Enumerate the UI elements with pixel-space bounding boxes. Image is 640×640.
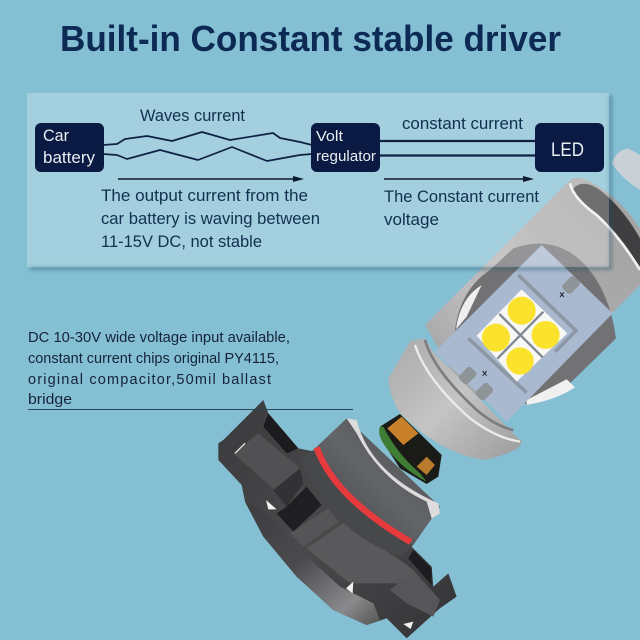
arrow: left — [118, 176, 304, 182]
block: LED — [535, 123, 604, 172]
circuit board — [435, 245, 613, 422]
block: volt regulator — [311, 123, 380, 172]
cylinder shell — [425, 178, 640, 403]
panel: translucent diagram background — [27, 93, 609, 267]
outer band — [245, 502, 380, 625]
block: car battery: Car — [43, 127, 69, 145]
constant current lines — [380, 141, 535, 156]
block: car battery: battery — [43, 149, 96, 167]
text: output current explanation — [101, 186, 320, 251]
icon: bulb base with red seal — [218, 400, 457, 638]
text: specifications — [28, 330, 290, 408]
block: volt regulator: regulator — [316, 148, 376, 165]
arrow: right — [384, 176, 534, 182]
text: specifications: bridge — [28, 392, 72, 408]
text: output current explanation: 11-15V DC, not stable — [101, 232, 262, 251]
LED chip — [477, 289, 567, 382]
collar — [388, 338, 522, 460]
far connector tip — [612, 148, 640, 190]
title: Built-in Constant stable driver — [60, 18, 561, 59]
block: car battery — [35, 123, 104, 172]
text: output current explanation: car battery is waving between — [101, 209, 320, 228]
icon: LED bulb body — [388, 148, 640, 460]
block: volt regulator: Volt — [316, 128, 344, 145]
cylinder — [313, 418, 440, 545]
text: constant current explanation: voltage — [384, 210, 439, 229]
driver board — [380, 414, 442, 484]
mounting flange — [218, 400, 457, 638]
label: constant current: constant current — [402, 115, 523, 133]
panel shadow — [30, 95, 612, 270]
text: constant current explanation — [384, 187, 539, 229]
text: output current explanation: The output current from the — [101, 186, 308, 205]
red seal — [317, 447, 411, 542]
block: LED: LED — [551, 140, 584, 161]
text: specifications: original compacitor,50mil ballast — [28, 372, 271, 388]
open end interior — [573, 184, 640, 267]
text: specifications: constant current chips original PY4115, — [28, 351, 279, 367]
recess — [455, 244, 616, 405]
text: specifications: DC 10-30V wide voltage input available, — [28, 330, 290, 346]
text: constant current explanation: The Constant current — [384, 187, 539, 206]
wavy current lines — [103, 132, 312, 161]
underline rule — [28, 408, 353, 410]
metal end face — [347, 418, 440, 518]
label: waves current: Waves current — [140, 107, 245, 125]
